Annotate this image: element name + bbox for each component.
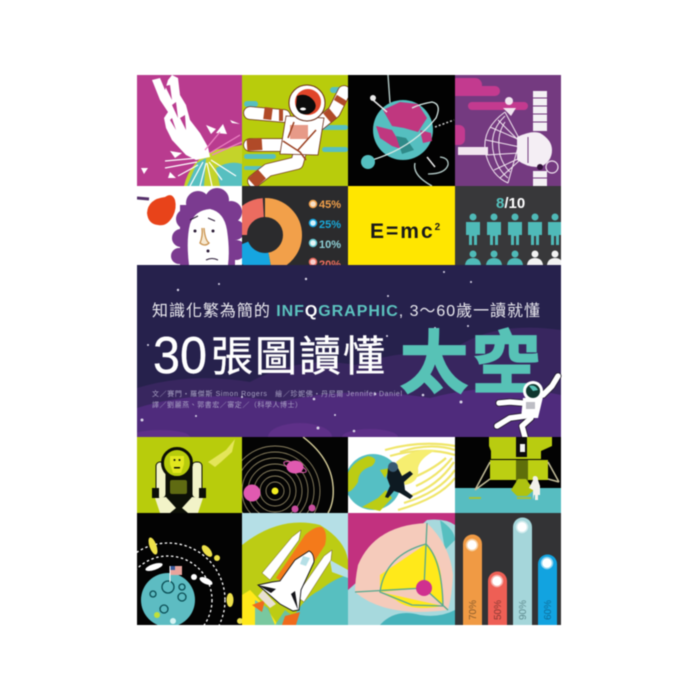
panel: earth core tile [348,513,455,625]
icon: apple [147,195,176,225]
legend [310,199,341,271]
authors: 文／賽門・羅傑斯 Simon Rogers 繪／珍妮佛・丹尼爾 Jennifer Daniel [152,389,402,398]
legend: 20% [319,259,341,271]
donut chart [238,208,292,262]
panel: earth tile [348,75,455,186]
formula: 2 [435,222,441,233]
legend: 10% [319,239,341,251]
legend: 25% [319,219,341,231]
icon: floating astronaut [497,376,558,437]
panel: title band [130,265,561,451]
bar 90%: 90% [518,600,529,620]
icon: people row 2 [465,250,563,265]
bar 50%: 50% [493,600,504,620]
icon: shuttle [258,527,332,611]
ratio heading: 8/10 [496,195,525,212]
authors: 譯／劉麗燕、郭書宏／審定／（科學人博士） [152,400,302,409]
panel: lunar lander tile [455,437,561,513]
icon: flag [170,566,182,582]
title: 30張圖讀懂 [154,334,384,376]
panel: solar system tile [241,436,349,514]
panel: astronaut walk tile [345,437,455,513]
icon: people row 1 [466,214,562,245]
icon: Newton portrait [171,188,246,265]
authors [152,389,402,409]
panel: comet tile [137,75,242,186]
title: 太空: 太空 [400,326,540,402]
panel: chimp tile [137,437,242,513]
panel: donut chart tile [238,186,348,271]
title: 30張圖讀懂: 30 [153,327,207,385]
bar 70%: 70% [468,600,479,620]
panel: Newton tile [137,186,246,265]
title: 30張圖讀懂: 張圖讀懂 [211,333,385,380]
panel: 8/10 people tile [455,186,563,265]
panel: astronaut tile [242,75,348,186]
subtitle: 知識化繁為簡的 INFQGRAPHIC, 3～60歲一讀就懂 [152,301,540,320]
formula: E=mc [370,220,435,243]
panel: satellite dish tile [450,75,561,186]
panel: bar chart tile [455,513,561,625]
panel: moon orbit tile [136,512,243,626]
bar 60%: 60% [543,600,554,620]
panel: space shuttle tile [242,513,348,625]
panel: E=mc2 tile [348,186,455,265]
legend: 45% [319,199,341,211]
